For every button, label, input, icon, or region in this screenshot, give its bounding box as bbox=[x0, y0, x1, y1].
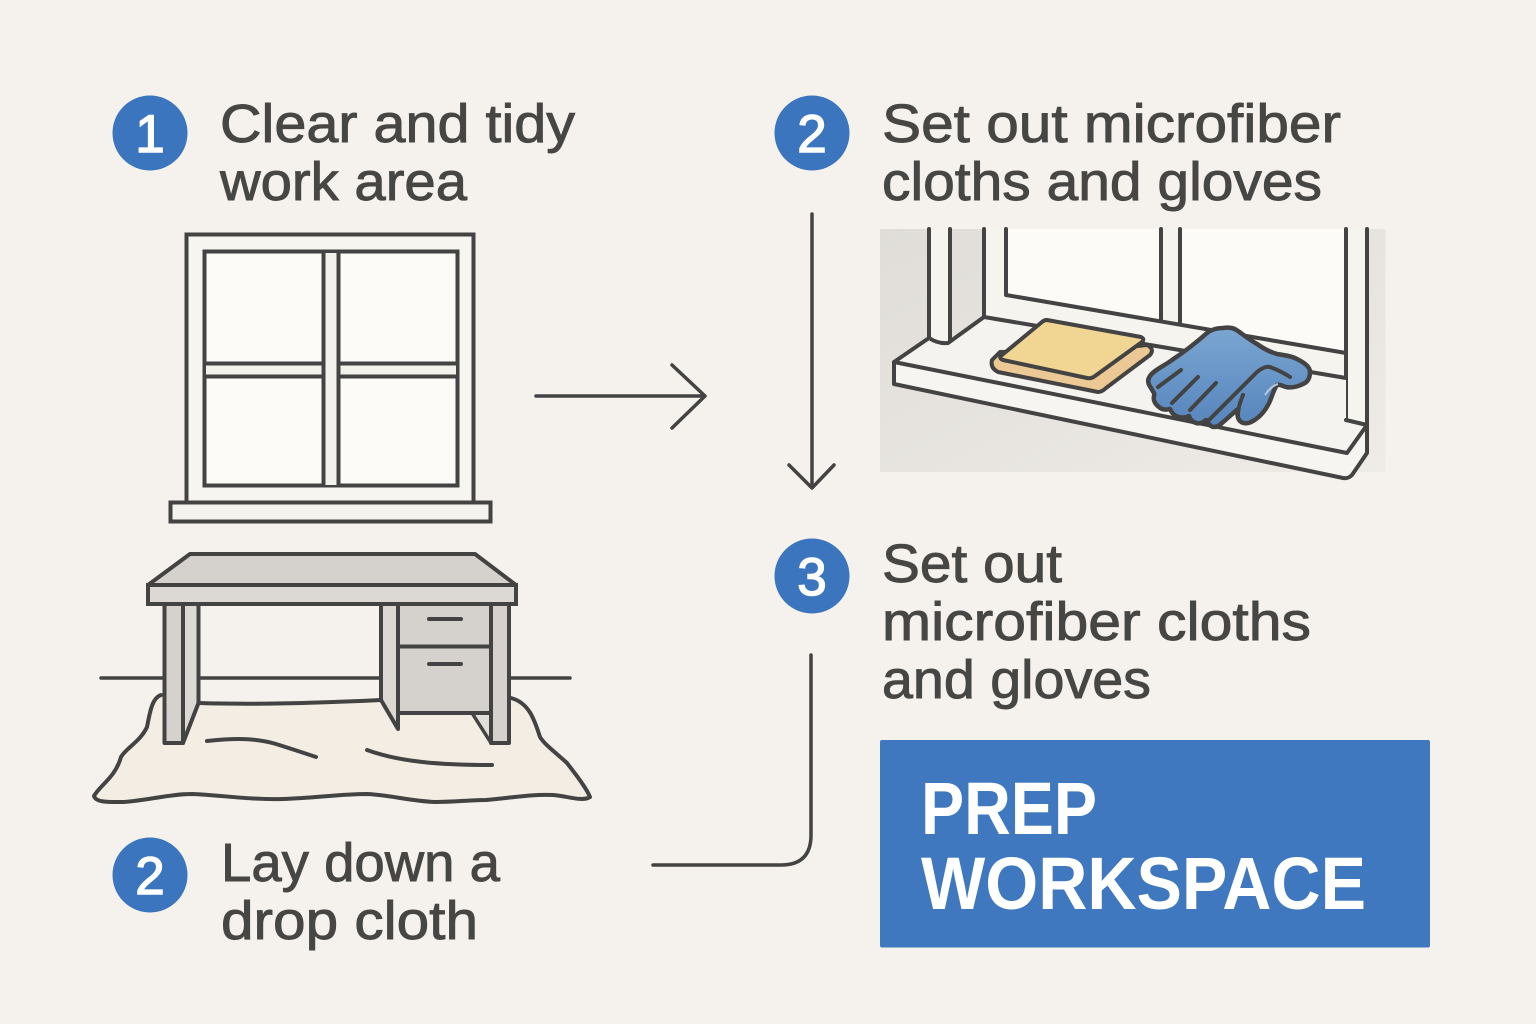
illustration: windowsill bbox=[880, 229, 1386, 478]
step 2 badge right: 2 bbox=[797, 105, 827, 164]
banner: prep workspace: PREP bbox=[921, 767, 1097, 850]
microfiber cloth bbox=[992, 320, 1152, 392]
step 2 badge left: 2 bbox=[135, 847, 165, 906]
step 2 badge left bbox=[112, 838, 188, 912]
banner: prep workspace bbox=[880, 740, 1430, 948]
arrow: down to step 3 bbox=[789, 214, 834, 488]
step 2 heading right: Set out microfiber bbox=[882, 94, 1341, 154]
cloth folds bbox=[207, 739, 492, 765]
step 2 heading right: cloths and gloves bbox=[882, 152, 1322, 212]
illustration: desk bbox=[148, 554, 516, 743]
step 3 heading: and gloves bbox=[882, 650, 1151, 710]
illustration: drop cloth bbox=[94, 695, 590, 802]
arrow: drop cloth to step 3 bbox=[653, 655, 811, 865]
step 1 badge: 1 bbox=[135, 105, 165, 164]
desk drawers bbox=[398, 604, 491, 713]
gloves bbox=[1148, 328, 1310, 427]
step 3 heading: microfiber cloths bbox=[882, 592, 1311, 652]
arrow: step 1 to step 2 bbox=[536, 365, 705, 428]
step 2 badge right bbox=[774, 96, 850, 170]
step 3 heading bbox=[882, 534, 1311, 710]
drop cloth heading bbox=[221, 833, 501, 951]
drop cloth heading: Lay down a bbox=[221, 833, 501, 893]
banner: prep workspace: WORKSPACE bbox=[921, 842, 1366, 925]
step 1 badge bbox=[112, 96, 188, 170]
glove finger lines bbox=[1158, 367, 1290, 421]
drop cloth heading: drop cloth bbox=[221, 891, 478, 951]
step 1 heading: Clear and tidy bbox=[220, 94, 575, 154]
step 1 heading bbox=[219, 94, 575, 212]
step 2 heading right bbox=[882, 94, 1341, 212]
step 1 heading: work area bbox=[219, 152, 468, 212]
step 3 heading: Set out bbox=[882, 534, 1062, 594]
sill bbox=[894, 317, 1367, 478]
step 3 badge: 3 bbox=[797, 548, 827, 607]
illustration: window bbox=[170, 234, 490, 522]
step 3 badge bbox=[774, 538, 850, 614]
illustration: floor line bbox=[101, 676, 570, 680]
